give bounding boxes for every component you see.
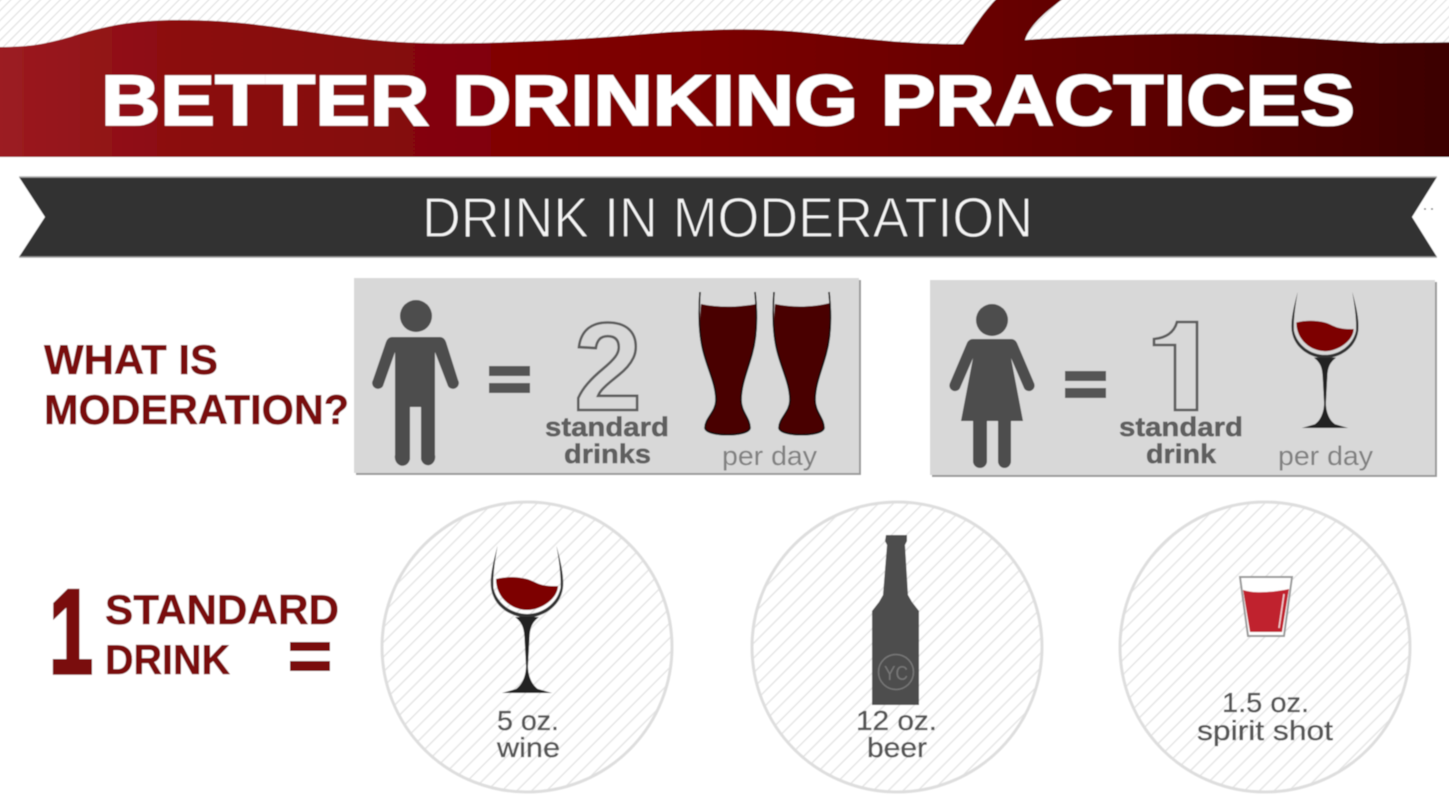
text: 5 oz. wine: 5 oz.	[497, 705, 559, 736]
text: standard drinks	[545, 412, 669, 469]
icon: wine glass	[1291, 292, 1359, 428]
text: 12 oz. beer	[856, 705, 937, 763]
heading: 1 standard drink equals	[49, 565, 339, 699]
equals sign	[1065, 371, 1106, 398]
panel: beer circle	[752, 502, 1042, 792]
header background hatch	[0, 0, 1449, 60]
icon: beer bottle	[872, 535, 919, 705]
text: 5 oz. wine	[496, 705, 560, 763]
text: per day: per day	[1278, 441, 1374, 471]
text: 12 oz. beer: beer	[867, 732, 927, 763]
header: wine wave band	[0, 0, 1449, 157]
text: 5 oz. wine: wine	[496, 732, 560, 763]
equals sign	[489, 366, 530, 393]
banner: drink in moderation	[19, 177, 1437, 257]
heading: what is moderation: WHAT IS	[44, 336, 218, 383]
heading: what is moderation	[44, 336, 349, 433]
text: 1.5 oz. spirit shot: 1.5 oz.	[1222, 687, 1309, 718]
text: standard drink: standard	[1119, 412, 1243, 442]
banner: drink in moderation: DRINK IN MODERATION	[422, 186, 1033, 250]
icon: shot glass	[1240, 577, 1292, 636]
text: standard drink	[1119, 412, 1243, 469]
text: 1.5 oz. spirit shot: spirit shot	[1197, 715, 1333, 746]
text: 12 oz. beer: 12 oz.	[856, 705, 937, 736]
panel: spirit circle	[1120, 502, 1410, 792]
panel: women	[930, 280, 1437, 477]
icon: man	[372, 300, 459, 466]
number 1	[1154, 322, 1197, 410]
heading: 1 standard drink equals: STANDARD	[105, 586, 339, 633]
heading: 1 standard drink equals: DRINK	[105, 636, 230, 683]
heading: 1 standard drink equals: 1	[49, 565, 93, 699]
icon: beer bottle: YC	[884, 663, 908, 685]
text: 1.5 oz. spirit shot	[1197, 687, 1333, 746]
panel: wine circle	[382, 502, 672, 792]
title: BETTER DRINKING PRACTICES	[101, 62, 1355, 141]
text: per day: per day	[722, 441, 818, 471]
icon: beer glasses	[699, 292, 831, 435]
icon: woman	[949, 304, 1035, 468]
panel: men	[354, 278, 861, 475]
icon: wine glass	[491, 546, 563, 693]
heading: what is moderation: MODERATION?	[44, 386, 349, 433]
text: standard drinks: standard	[545, 412, 669, 442]
text: standard drink: drink	[1146, 439, 1217, 469]
number 2: 2	[574, 298, 642, 437]
text: standard drinks: drinks	[564, 439, 651, 469]
